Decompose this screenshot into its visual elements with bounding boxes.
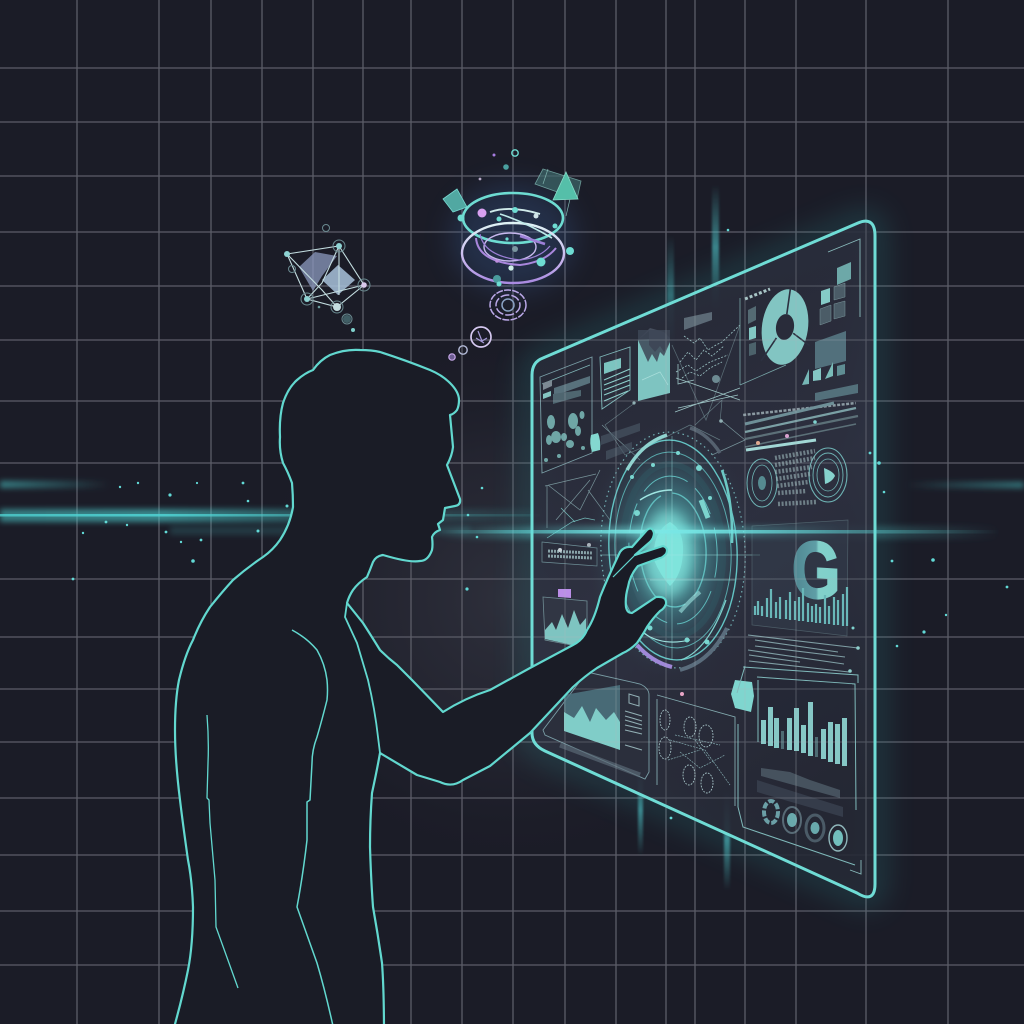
screen outer glow — [532, 221, 875, 897]
widget: donut chart — [757, 285, 817, 368]
widget: teal capsule — [590, 433, 600, 452]
widget: small data strip — [542, 542, 597, 566]
widget: bottom-left area chart card — [543, 672, 649, 779]
touch point core — [654, 522, 683, 586]
panel border — [532, 221, 875, 897]
right polyhedra — [535, 169, 581, 199]
widget: concentric dials and digits — [747, 448, 847, 507]
inner line: back of arm — [345, 603, 380, 753]
hud glow — [585, 422, 755, 682]
widget: top-left map card — [540, 357, 592, 473]
widget: text lines — [748, 626, 860, 673]
mini sparkline and band — [761, 768, 840, 798]
human silhouette reaching toward screen — [173, 350, 667, 1024]
left cube — [443, 189, 467, 212]
upper ring — [463, 193, 563, 243]
background glow between figure and screen — [240, 330, 780, 870]
map blobs — [544, 411, 585, 462]
icon glow — [451, 184, 575, 292]
widget: bar chart frame — [737, 666, 861, 874]
grid showing through screen — [534, 222, 874, 896]
G mark: G — [792, 525, 840, 617]
vertical light streaks — [638, 185, 730, 890]
widget: circuit diagram — [657, 692, 735, 806]
bar chart columns — [761, 702, 847, 766]
bright beam across screen — [440, 526, 1000, 537]
widget: left peak chart — [543, 589, 587, 648]
silhouette body — [173, 350, 667, 1024]
widget: G chart — [752, 520, 848, 636]
bar series — [755, 587, 847, 626]
inner spiral — [476, 209, 556, 265]
inner line: chest and torso — [292, 630, 333, 1024]
inner line: finger separation — [613, 555, 635, 577]
holographic screen panel — [530, 220, 876, 898]
widget: small blocks column — [740, 289, 786, 385]
floating particles — [72, 229, 1008, 819]
thought bubble: small — [471, 327, 491, 347]
widget: list card — [600, 347, 630, 409]
sparks — [512, 150, 518, 156]
thought bubble: spiral medium — [490, 290, 526, 320]
screen right edge glow — [874, 240, 886, 880]
hud rings — [595, 428, 751, 672]
hud crosshair — [600, 436, 760, 660]
hud arcs — [627, 428, 732, 670]
hud nodes — [630, 451, 712, 644]
right horizontal light beams — [440, 482, 1024, 539]
left horizontal light beams — [0, 481, 540, 535]
panel body — [532, 221, 875, 897]
lower ring — [462, 223, 564, 283]
thought bubble: tiny — [449, 346, 467, 360]
widget: left wire network — [545, 400, 745, 547]
widget: progress bars — [743, 403, 858, 450]
central holographic target dial — [585, 422, 760, 682]
widget: wire scatter chart — [672, 312, 740, 420]
thought icon: left crystal — [284, 224, 370, 332]
gauge row — [764, 801, 847, 851]
inner line: left side — [207, 715, 238, 988]
thought icon: orbital rings — [443, 150, 581, 292]
widget: top-right squares — [802, 239, 860, 401]
widget: area chart top — [638, 328, 670, 401]
widget: teal hexagon node — [731, 680, 754, 712]
widget: blurred bars beside hexagon — [601, 423, 640, 460]
glowing touch point — [644, 510, 692, 598]
